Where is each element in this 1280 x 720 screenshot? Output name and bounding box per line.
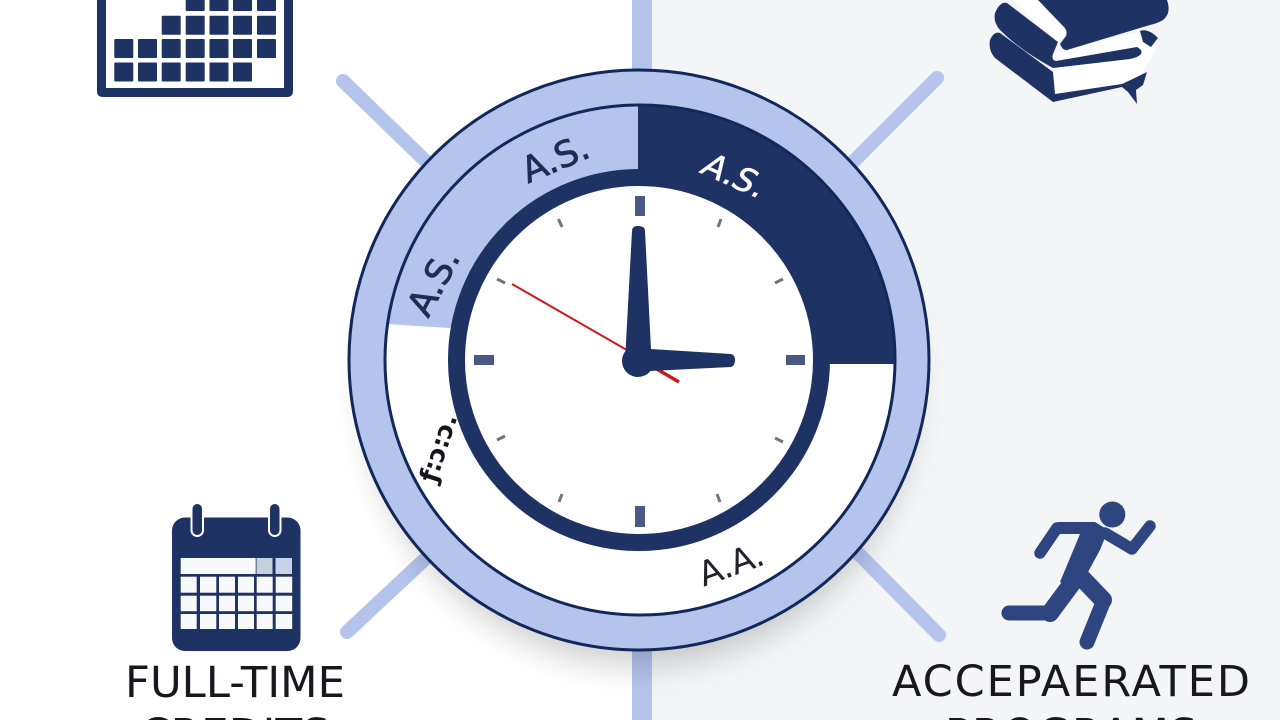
minor hour ticks	[497, 219, 783, 502]
light blue band segment	[380, 100, 638, 328]
dark inner ring	[456, 178, 822, 542]
rays behind the clock	[343, 0, 939, 720]
calendar grid	[181, 558, 292, 629]
label: A.A.: A.A.	[693, 535, 770, 595]
calendar rings	[192, 503, 280, 536]
icon: stack of books	[990, 0, 1169, 104]
calendar body	[172, 518, 300, 651]
icon: progress calendar	[97, 0, 293, 97]
heading: accelerated programs: ACCEPAERATED	[892, 657, 1250, 707]
icon: running figure	[1009, 502, 1150, 642]
outer ring	[349, 70, 929, 650]
clock shadow	[368, 120, 912, 664]
clock	[349, 70, 929, 664]
band outline	[385, 105, 895, 615]
book pages	[1013, 0, 1067, 42]
label: A.S. left: A.S.	[400, 242, 469, 323]
minute and hour hands	[622, 226, 735, 377]
second hand	[512, 284, 679, 382]
label: A.S. upper left: A.S.	[515, 127, 596, 192]
dark band segment	[638, 100, 900, 364]
book covers	[1038, 0, 1169, 50]
major hour ticks	[474, 196, 805, 527]
heading: full-time credits: FULL-TIME	[125, 658, 345, 708]
label: A.S. dark segment: A.S.	[695, 144, 772, 207]
label: garbled left: ƒ:ɔ:ɔ.	[413, 410, 463, 488]
white band	[385, 105, 895, 615]
icon: wall calendar	[172, 503, 300, 651]
